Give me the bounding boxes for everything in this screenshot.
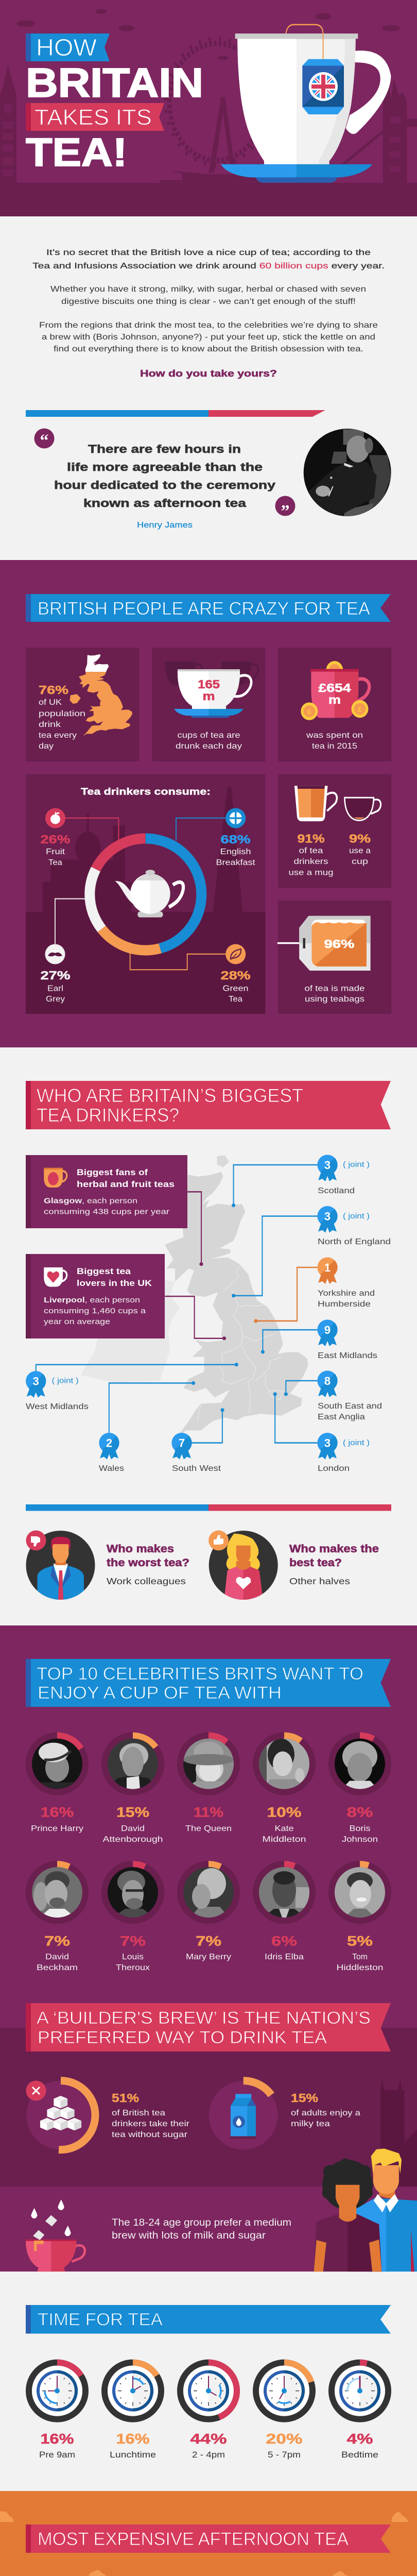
clock: pre 9am: Pre 9am	[39, 2450, 75, 2460]
panel: mug versus cup: of tea	[299, 846, 323, 855]
legend labels: 28%	[220, 969, 250, 982]
celebrity: David Beckham	[29, 1864, 85, 1972]
callout: biggest tea lovers: Biggest tea	[77, 1267, 131, 1276]
intro text block: It’s no secret that the British love a nice cup of tea; according to the	[46, 248, 371, 257]
caption: 18-24 age group: The 18-24 age group prefer a medium	[112, 2217, 291, 2228]
rank: Yorkshire and Humberside: Yorkshire and	[318, 1289, 375, 1298]
intro text block: a brew with (Boris Johnson, anyone?) - put your feet up, stick the kettle on and	[42, 333, 375, 342]
rank: West Midlands	[26, 1371, 89, 1411]
panel: mug versus cup: 9%	[349, 832, 371, 845]
celebrity: Tom Hiddleston: 5%	[347, 1933, 373, 1948]
teacup illustration	[221, 25, 391, 183]
banner heading: TEA DRINKERS?	[37, 1105, 179, 1126]
stat: 51% no sugar: 51%	[112, 2091, 139, 2105]
stat: 15% milky tea	[209, 2081, 360, 2150]
stat: 15% milky tea: 15%	[291, 2091, 318, 2105]
panel: £654m spent: m	[328, 693, 341, 706]
callout: herbal and fruit teas: herbal and fruit teas	[77, 1180, 175, 1189]
quote text: known as afternoon tea	[83, 497, 247, 510]
celebrity: Boris Johnson	[332, 1735, 388, 1844]
celebrity: Louis Theroux	[105, 1864, 161, 1972]
rank: Scotland: ( joint )	[343, 1161, 370, 1169]
region rankings	[26, 1155, 391, 1473]
legend labels: English	[220, 848, 251, 856]
portrait: Henry James	[302, 428, 393, 519]
rank: Wales	[99, 1433, 124, 1473]
worst tea maker: the worst tea?	[107, 1557, 189, 1569]
intro text block: Whether you have it strong, milky, with sugar, herbal or chased with seven	[50, 285, 366, 294]
stat: 51% no sugar: drinkers take their	[112, 2120, 190, 2128]
icon: opening quote mark	[34, 429, 55, 450]
icon: red teacup with milk and sugar	[26, 2199, 85, 2272]
banner heading: builder's brew: PREFERRED WAY TO DRINK TEA	[38, 2028, 327, 2047]
section: British people are crazy for tea	[0, 560, 417, 1047]
panel: tea drinkers consume	[26, 774, 266, 1014]
icon: teacup on saucer	[165, 662, 258, 718]
panel: 165m cups a day: drunk each day	[176, 742, 242, 751]
rank: West Midlands: ( joint )	[52, 1377, 79, 1385]
quote attribution: Henry James	[137, 521, 193, 530]
rank: London: London	[318, 1464, 350, 1473]
rank: Yorkshire and Humberside: 1	[324, 1261, 331, 1274]
clock: pre 9am	[29, 2363, 85, 2460]
panel: £654m spent: was spent on	[306, 731, 363, 740]
legend labels: Earl	[47, 985, 63, 993]
callout: biggest tea lovers	[26, 1254, 165, 1338]
best tea maker: Who makes the	[289, 1543, 379, 1555]
title: BRITAIN	[26, 60, 203, 106]
celebrity: Boris Johnson: Boris	[349, 1824, 371, 1833]
church silhouette	[380, 2078, 417, 2187]
icon: mug and cup	[294, 786, 381, 821]
panel: 76% drink tea daily: 76%	[39, 683, 68, 697]
legend labels: 26%	[40, 833, 70, 846]
panel: 76% drink tea daily	[26, 648, 139, 761]
clock: lunchtime: Lunchtime	[110, 2450, 156, 2460]
section: most expensive afternoon tea	[0, 2491, 417, 2576]
clock: bedtime: 4%	[347, 2431, 373, 2447]
worst tea maker: Who makes	[107, 1543, 174, 1555]
panel: £654m spent: £	[307, 708, 311, 716]
celebrity: Kate Middleton: 10%	[267, 1804, 302, 1820]
rank: South East and East Anglia: East Anglia	[318, 1413, 365, 1421]
rank: North of England: ( joint )	[343, 1212, 370, 1221]
illustration: young couple	[314, 2148, 417, 2272]
celebrity: Kate Middleton	[256, 1735, 312, 1844]
legend labels: 68%	[220, 833, 250, 846]
rank: South East and East Anglia	[317, 1370, 382, 1421]
clock: 5 - 7pm: 20%	[266, 2431, 303, 2447]
intro text block: How do you take yours?	[140, 368, 277, 379]
banner heading: MOST EXPENSIVE AFTERNOON TEA	[38, 2529, 349, 2549]
panel: 76% drink tea daily: population	[39, 709, 85, 718]
panel: 76% drink tea daily: drink	[39, 720, 61, 729]
rank: Scotland: 3	[324, 1159, 331, 1172]
panel: 76% drink tea daily: of UK	[39, 698, 62, 707]
legend labels: 27%	[40, 969, 70, 982]
legend labels: Green	[222, 985, 248, 993]
connector lines	[55, 818, 226, 970]
intro text block: Tea and Infusions Association we drink around 60 billion cups every year.	[32, 262, 385, 270]
panel: mug versus cup: drinkers	[293, 857, 328, 866]
panel: mug versus cup: cup	[352, 857, 368, 866]
callout: herbal and fruit teas	[26, 1155, 187, 1228]
clouds	[0, 2511, 408, 2576]
panel: £654m spent: £654	[318, 681, 351, 694]
celebrity: Idris Elba: 6%	[271, 1933, 297, 1948]
panel: 165m cups a day: cups of tea are	[177, 731, 240, 740]
celebrity: Prince Harry: Prince Harry	[31, 1824, 83, 1833]
rank: Wales: Wales	[99, 1464, 124, 1473]
man	[356, 2148, 417, 2272]
callout: herbal and fruit teas: Glasgow , each person	[44, 1197, 137, 1206]
skyline: St Paul's and the Shard	[43, 787, 242, 912]
icon: thumbs down	[26, 1530, 46, 1551]
panel: 76% drink tea daily: day	[39, 742, 54, 751]
icon: thumbs up	[208, 1530, 229, 1551]
rank: North of England	[317, 1206, 391, 1246]
panel: teabags	[277, 901, 391, 1014]
banner heading: ENJOY A CUP OF TEA WITH	[38, 1683, 282, 1703]
divider bar	[26, 410, 325, 417]
celebrity: The Queen	[180, 1735, 237, 1833]
celebrity: Louis Theroux: 7%	[120, 1933, 146, 1948]
stat: 51% no sugar	[26, 2080, 190, 2150]
quote text: There are few hours in	[88, 443, 241, 455]
panel: mug versus cup: use a mug	[288, 869, 334, 877]
quote text: hour dedicated to the ceremony	[54, 479, 276, 492]
panel: tea drinkers consume: Tea drinkers consume:	[81, 786, 211, 796]
panel: 165m cups a day: m	[203, 689, 215, 703]
callout: biggest tea lovers: year on average	[44, 1317, 110, 1326]
title: TEA!	[26, 130, 127, 175]
celebrity: David Beckham: Beckham	[37, 1963, 78, 1972]
rank: Yorkshire and Humberside	[317, 1257, 375, 1309]
icon: milk carton	[231, 2094, 256, 2139]
intro text block: digestive biscuits one thing is clear - we can’t get enough of the stuff!	[61, 297, 356, 306]
rank: East Midlands	[317, 1319, 377, 1360]
stat: 15% milky tea: of adults enjoy a	[291, 2109, 360, 2117]
panel: £654m spent	[278, 648, 391, 761]
icon: closing quote mark	[275, 496, 296, 521]
banner heading	[26, 1081, 391, 1129]
rank: Yorkshire and Humberside: Humberside	[318, 1300, 371, 1309]
clock: 5 - 7pm: 5 - 7pm	[268, 2450, 301, 2460]
icon: opening quote mark: “	[40, 431, 48, 450]
celebrity: Idris Elba: Idris Elba	[265, 1953, 304, 1961]
rank: South West: South West	[172, 1464, 221, 1473]
clock: pre 9am: 16%	[40, 2431, 74, 2447]
icon: heart mug	[44, 1267, 67, 1287]
clock: 2 - 4pm: 44%	[190, 2431, 227, 2447]
callout: biggest tea lovers: consuming 1,460 cups a	[44, 1307, 146, 1315]
caption: 18-24 age group	[112, 2217, 291, 2241]
rank: East Midlands: East Midlands	[318, 1351, 377, 1360]
worst tea maker: Work colleagues	[107, 1576, 186, 1586]
section: top 10 celebrities	[0, 1625, 417, 2272]
map connector lines	[36, 1165, 318, 1443]
stat: 15% milky tea: milky tea	[291, 2120, 330, 2128]
icon: sugar cubes	[40, 2096, 81, 2130]
rank: South West: 7	[179, 1437, 185, 1450]
celebrity: The Queen: The Queen	[185, 1824, 232, 1833]
rank: Wales: 2	[106, 1437, 112, 1450]
clock: 5 - 7pm	[256, 2363, 312, 2460]
rank: Scotland	[317, 1155, 370, 1195]
celebrity: The Queen: 11%	[194, 1804, 223, 1820]
panel: mug versus cup: use a	[349, 846, 371, 855]
rank: London	[317, 1433, 370, 1473]
banner heading	[26, 2524, 391, 2553]
icon: closing quote mark: ”	[281, 502, 289, 521]
celebrity: Mary Berry: Mary Berry	[186, 1953, 231, 1961]
intro text block: find out everything there is to know about the British obsession with tea.	[54, 345, 363, 353]
stat: 51% no sugar: of British tea	[112, 2109, 165, 2117]
celebrity: Tom Hiddleston: Hiddleston	[337, 1963, 383, 1972]
celebrity: Mary Berry	[180, 1864, 237, 1961]
icon: Earl Grey moustache	[45, 944, 65, 964]
icon: UK map	[70, 654, 132, 736]
best tea maker: best tea?	[289, 1557, 342, 1569]
icon: fruit tea cup	[44, 1168, 67, 1188]
celebrity: Tom Hiddleston: Tom	[352, 1953, 368, 1961]
icon: English breakfast plate	[225, 808, 246, 828]
panel: teabags: of tea is made	[305, 985, 364, 993]
celebrity: Boris Johnson: Johnson	[342, 1835, 378, 1844]
best tea maker: Other halves	[289, 1576, 350, 1586]
celebrity: Kate Middleton: Kate	[275, 1824, 294, 1833]
celebrity: Tom Hiddleston	[332, 1864, 388, 1972]
caption: 18-24 age group: brew with lots of milk and sugar	[112, 2230, 266, 2241]
icon: green tea leaf	[225, 944, 246, 964]
legend labels: Breakfast	[216, 858, 255, 867]
banner heading: builder's brew	[26, 2003, 391, 2052]
celebrity: David Beckham: 7%	[44, 1933, 70, 1948]
rank: Scotland: Scotland	[318, 1187, 355, 1195]
icon: woman	[209, 1531, 278, 1602]
panel: teabags: using teabags	[305, 995, 364, 1004]
panel: 165m cups a day: 165	[198, 677, 220, 691]
clock: 2 - 4pm: 2 - 4pm	[192, 2450, 225, 2460]
map location dots	[192, 1204, 288, 1412]
banner heading	[26, 2305, 391, 2334]
legend labels: Tea	[229, 995, 242, 1004]
celebrity: David Attenborough: 15%	[116, 1804, 149, 1820]
legend labels: Tea	[48, 858, 62, 867]
stat: 51% no sugar: tea without sugar	[112, 2130, 188, 2139]
banner heading	[26, 594, 391, 622]
celebrity: Boris Johnson: 8%	[347, 1804, 373, 1820]
intro text block: From the regions that drink the most tea, to the celebrities we’re dying to share	[39, 321, 378, 330]
celebrity: David Beckham: David	[45, 1953, 69, 1961]
celebrity: Louis Theroux: Louis	[122, 1953, 144, 1961]
panel: £654m spent: tea in 2015	[312, 742, 357, 751]
rank: West Midlands: 3	[33, 1375, 39, 1388]
palace silhouette	[22, 2576, 396, 2577]
callout: herbal and fruit teas: consuming 438 cups per year	[44, 1208, 169, 1216]
quote	[34, 428, 393, 530]
clock: lunchtime: 16%	[116, 2431, 150, 2447]
banner heading: BRITISH PEOPLE ARE CRAZY FOR TEA	[38, 599, 371, 619]
celebrity: David Attenborough: David	[121, 1824, 145, 1833]
celebrity: David Attenborough: Attenborough	[103, 1835, 163, 1844]
panel: £654m spent: £	[358, 706, 362, 713]
title: TAKES ITS	[34, 105, 152, 130]
clock: 2 - 4pm	[180, 2363, 237, 2460]
celebrity: Prince Harry: 16%	[40, 1804, 74, 1820]
banner heading: TOP 10 CELEBRITIES BRITS WANT TO	[37, 1664, 363, 1684]
celebrity: Kate Middleton: Middleton	[263, 1835, 306, 1844]
quote text	[54, 443, 276, 510]
callout: biggest tea lovers: Liverpool , each person	[44, 1296, 140, 1304]
legend labels: Fruit	[46, 848, 65, 856]
title: HOW	[36, 34, 97, 61]
hero panel	[0, 0, 417, 216]
icon: union jack on tea bag	[309, 72, 338, 101]
UK regions map	[81, 1155, 308, 1437]
icon: teapot	[115, 870, 183, 918]
panel: 165m cups a day	[152, 648, 266, 761]
quote text: life more agreeable than the	[67, 461, 263, 473]
rank: North of England: 3	[324, 1210, 331, 1223]
rank: South East and East Anglia: 8	[324, 1375, 331, 1387]
worst tea maker	[26, 1530, 189, 1602]
woman	[314, 2159, 381, 2272]
banner heading	[26, 1659, 391, 1707]
icon: man in suit	[26, 1531, 95, 1602]
legend labels: Grey	[46, 995, 65, 1004]
clock: bedtime	[332, 2363, 388, 2460]
rank: South East and East Anglia: South East and	[318, 1402, 382, 1411]
clock: lunchtime	[105, 2363, 161, 2460]
clock: bedtime: Bedtime	[341, 2450, 378, 2460]
callout: herbal and fruit teas: Biggest fans of	[77, 1168, 148, 1177]
celebrity: Mary Berry: 7%	[196, 1933, 221, 1948]
panel: mug versus cup: 91%	[298, 832, 324, 845]
icon: no symbol	[26, 2080, 46, 2101]
section: who are Britain's biggest tea drinkers	[26, 1081, 391, 1473]
celebrity: Prince Harry	[29, 1735, 85, 1833]
rank: South West	[171, 1433, 221, 1473]
icon: fruit tea apple	[45, 808, 65, 828]
intro text block	[32, 248, 385, 379]
callout: biggest tea lovers: lovers in the UK	[77, 1279, 152, 1288]
celebrity: Louis Theroux: Theroux	[116, 1963, 150, 1972]
title	[26, 33, 203, 175]
banner heading: TIME FOR TEA	[38, 2310, 163, 2329]
banner heading: builder's brew: A ‘BUILDER'S BREW’ IS THE NATION’S	[37, 2008, 371, 2028]
celebrity: Idris Elba	[256, 1864, 312, 1961]
rank: London: 3	[324, 1437, 331, 1450]
legend labels	[40, 833, 255, 1004]
celebrity: David Attenborough	[103, 1735, 163, 1844]
panel: mug versus cup	[278, 774, 391, 888]
panel: 76% drink tea daily: tea every	[39, 731, 77, 740]
section: time for tea	[26, 2305, 391, 2460]
divider bar	[26, 1504, 391, 1511]
best tea maker	[208, 1530, 379, 1602]
donut chart	[90, 839, 201, 950]
icon: teabag	[277, 916, 371, 971]
London skyline silhouette	[0, 9, 417, 183]
rank: West Midlands: West Midlands	[26, 1402, 89, 1411]
rank: London: ( joint )	[343, 1439, 370, 1447]
rank: North of England: North of England	[318, 1238, 391, 1246]
panel: teabags: 96%	[324, 937, 354, 951]
banner heading: WHO ARE BRITAIN’S BIGGEST	[37, 1085, 303, 1106]
icon: mug with coins	[301, 661, 369, 720]
rank: East Midlands: 9	[324, 1324, 331, 1336]
